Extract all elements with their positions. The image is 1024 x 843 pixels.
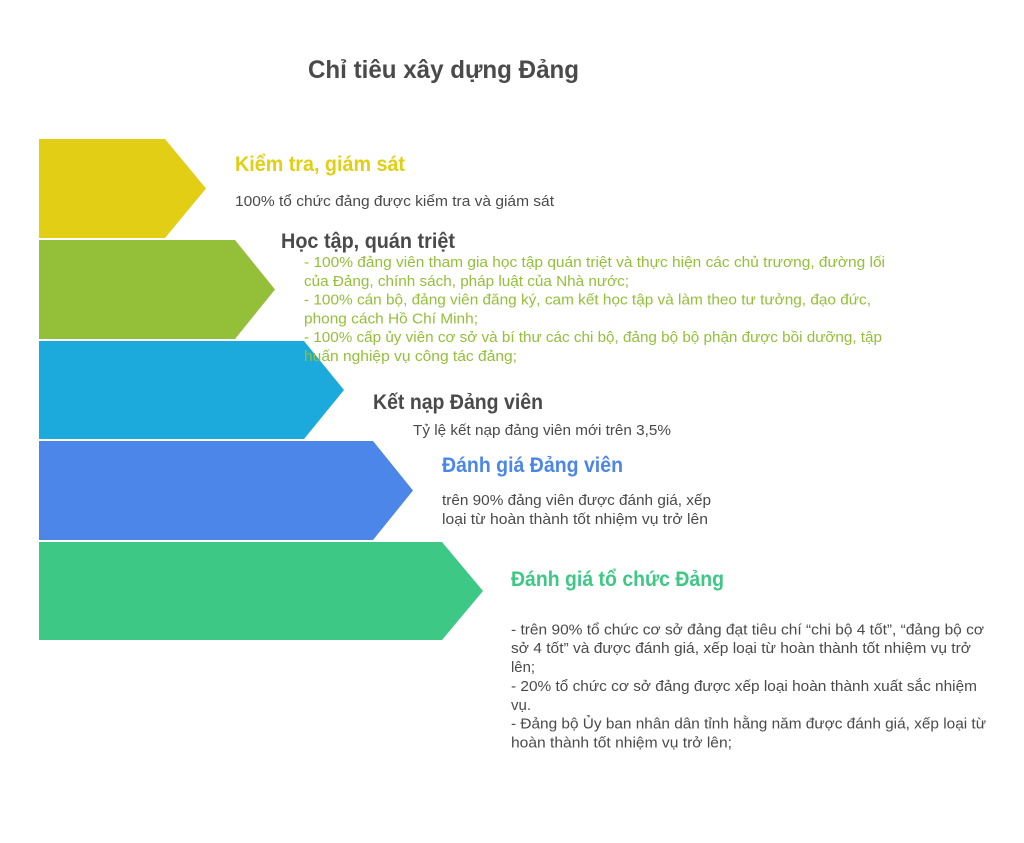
block: Học tập, quán triệt: của Đảng, chính sách, pháp luật của Nhà nước; (304, 273, 629, 290)
block: Đánh giá Đảng viên: loại từ hoàn thành tốt nhiệm vụ trở lên (442, 511, 708, 528)
block: Học tập, quán triệt: - 100% đảng viên tham gia học tập quán triệt và thực hiện các chủ trương, đường lối (304, 254, 885, 271)
block: Kiểm tra, giám sát (235, 153, 555, 210)
block: Đánh giá Đảng viên (442, 454, 711, 528)
arrow: light green (39, 240, 275, 339)
block: Học tập, quán triệt: - 100% cấp ủy viên cơ sở và bí thư các chi bộ, đảng bộ bộ phận được bồi dưỡng, tập (304, 329, 882, 346)
block: Đánh giá tổ chức Đảng: lên; (511, 659, 535, 676)
block: Học tập, quán triệt: Học tập, quán triệt (281, 230, 455, 253)
block: Đánh giá tổ chức Đảng: - Đảng bộ Ủy ban nhân dân tỉnh hằng năm được đánh giá, xếp loại từ (511, 714, 986, 732)
block: Học tập, quán triệt: - 100% cán bộ, đảng viên đăng ký, cam kết học tập và làm theo tư tưởng, đạo đức, (304, 292, 871, 308)
block: Đánh giá Đảng viên: Đánh giá Đảng viên (442, 454, 623, 477)
block: Kết nạp Đảng viên: Tỷ lệ kết nạp đảng viên mới trên 3,5% (413, 422, 671, 439)
block: Đánh giá tổ chức Đảng: hoàn thành tốt nhiệm vụ trở lên; (511, 734, 732, 752)
block: Kiểm tra, giám sát: Kiểm tra, giám sát (235, 153, 405, 176)
block: Đánh giá tổ chức Đảng: sở 4 tốt” và được đánh giá, xếp loại từ hoàn thành tốt nhiệm vụ trở (511, 640, 971, 657)
block: Đánh giá tổ chức Đảng (511, 568, 986, 752)
block: Đánh giá tổ chức Đảng: Đánh giá tổ chức Đảng (511, 568, 724, 591)
block: Đánh giá tổ chức Đảng: vụ. (511, 697, 531, 714)
arrow: yellow (39, 139, 206, 238)
arrow: blue (39, 441, 413, 540)
arrow: green (39, 542, 483, 640)
block: Kết nạp Đảng viên (373, 391, 671, 439)
block: Kết nạp Đảng viên: Kết nạp Đảng viên (373, 391, 543, 414)
block: Học tập, quán triệt: huấn nghiệp vụ công tác đảng; (304, 348, 517, 365)
block: Đánh giá Đảng viên: trên 90% đảng viên được đánh giá, xếp (442, 492, 711, 509)
block: Đánh giá tổ chức Đảng: - 20% tổ chức cơ sở đảng được xếp loại hoàn thành xuất sắc nhiệm (511, 678, 977, 695)
arrow: cyan blue (39, 341, 344, 439)
title: Chỉ tiêu xây dựng Đảng (308, 56, 579, 84)
block: Đánh giá tổ chức Đảng: - trên 90% tổ chức cơ sở đảng đạt tiêu chí “chi bộ 4 tốt”, “đảng bộ cơ (511, 622, 984, 638)
block: Học tập, quán triệt: phong cách Hồ Chí Minh; (304, 310, 478, 328)
block: Kiểm tra, giám sát: 100% tổ chức đảng được kiểm tra và giám sát (235, 193, 555, 210)
block: Học tập, quán triệt (281, 230, 885, 365)
